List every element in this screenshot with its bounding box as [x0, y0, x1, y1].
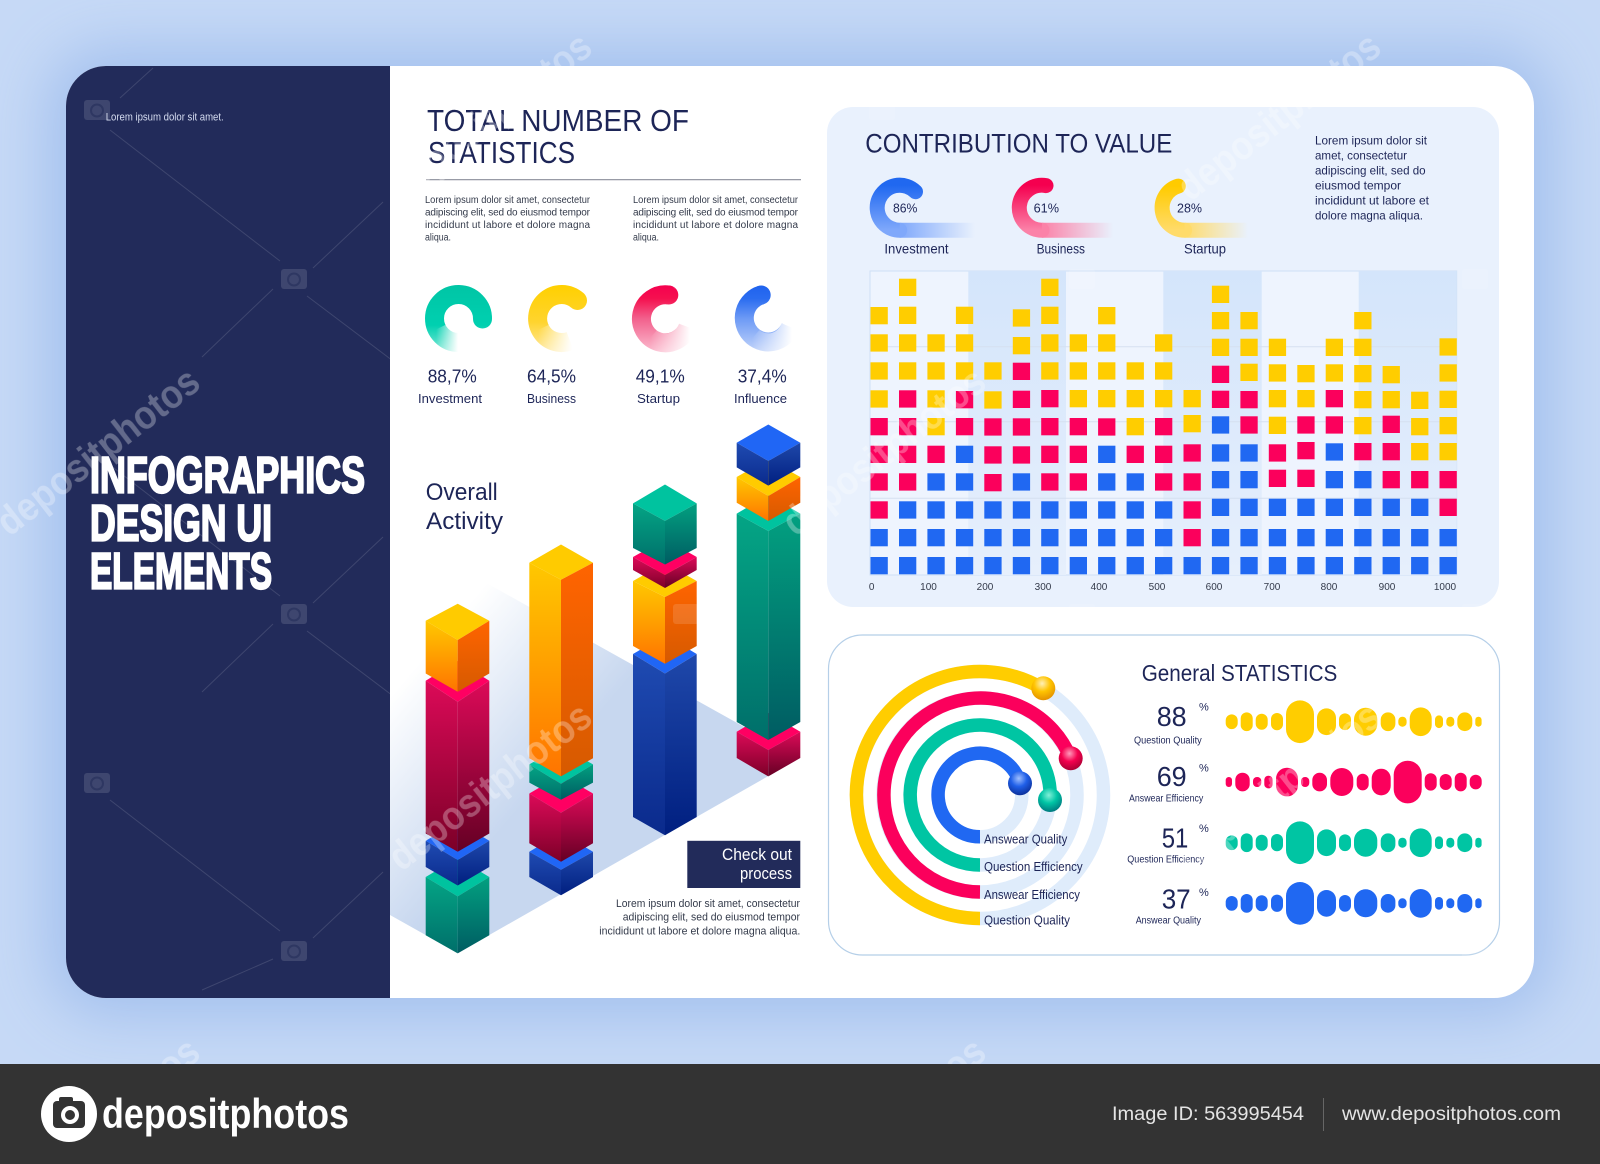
footer bar — [0, 1064, 1600, 1164]
donut: influence — [734, 286, 792, 406]
stat: answear efficiency 69: 69 — [1157, 761, 1187, 792]
stat: question efficiency 51: 51 — [1162, 822, 1188, 853]
chart x axis labels: 200 — [977, 582, 994, 593]
chart x axis labels: 800 — [1321, 582, 1338, 593]
text block: left column — [425, 195, 591, 244]
text block: right column: incididunt ut labore et dolore magna — [633, 220, 798, 231]
gauge: business: Business — [1037, 240, 1085, 256]
isometric column 2 — [529, 544, 593, 895]
wave bar: blue — [1226, 882, 1482, 925]
chart x axis labels: 500 — [1149, 582, 1166, 593]
button: check out process: Check out — [722, 846, 792, 864]
watermark overlay: depositphotos — [1169, 694, 1389, 880]
watermark overlay: depositphotos — [380, 694, 600, 880]
gauge: investment — [877, 185, 975, 256]
stat: answear efficiency 69: Answear Efficiency — [1129, 794, 1203, 805]
main title: DESIGN UI — [90, 494, 272, 552]
stat: question quality 88: Question Quality — [1134, 735, 1202, 746]
heading: overall activity — [426, 479, 504, 535]
footer image id: Image ID: 563995454 — [1112, 1104, 1304, 1125]
chart x axis labels: 600 — [1206, 582, 1223, 593]
isometric column 1 — [426, 604, 489, 953]
gauge: business: 61% — [1034, 200, 1059, 215]
donut: influence: 37,4% — [738, 367, 787, 387]
heading: contribution to value: CONTRIBUTION TO VALUE — [865, 129, 1172, 159]
donut: business: Business — [527, 391, 576, 406]
stat: question quality 88 — [1134, 701, 1209, 746]
text block: contribution description: adipiscing elit, sed do — [1315, 164, 1426, 178]
button: check out process: process — [740, 865, 792, 883]
donut: investment: Investment — [418, 391, 482, 406]
chart: stacked square bars — [870, 271, 1457, 575]
button: check out process — [687, 841, 800, 888]
donut: startup: Startup — [637, 391, 680, 406]
stat: question efficiency 51: % — [1199, 823, 1209, 835]
stat: answear quality 37 — [1136, 883, 1209, 926]
heading: overall activity: Overall — [426, 479, 498, 506]
watermark overlay: depositphotos — [1169, 24, 1389, 210]
icon: footer camera logo — [41, 1086, 97, 1142]
text block: right column — [633, 195, 799, 244]
gauge: business — [1019, 185, 1113, 256]
donut: business: 64,5% — [527, 367, 576, 387]
gauge: startup: 28% — [1177, 200, 1202, 215]
main title: ELEMENTS — [90, 542, 272, 600]
heading: total number of statistics: STATISTICS — [428, 135, 575, 170]
text block: under button: incididunt ut labore et dolore magna aliqua. — [599, 926, 800, 938]
main title: INFOGRAPHICS — [90, 446, 365, 504]
heading: general statistics: General STATISTICS — [1142, 660, 1337, 686]
text block: under button: adipiscing elit, sed do eiusmod tempor — [623, 912, 800, 924]
heading: total number of statistics: TOTAL NUMBER OF — [427, 103, 689, 138]
chart x axis labels: 100 — [920, 582, 937, 593]
radial progress chart — [856, 672, 1104, 918]
text block: left column: aliqua. — [425, 232, 451, 244]
wave bar: yellow — [1226, 700, 1482, 743]
radial chart labels: Answear Quality — [984, 832, 1068, 846]
chart x axis labels: 700 — [1264, 582, 1281, 593]
stat: question quality 88: 88 — [1157, 701, 1187, 732]
isometric column 3 — [633, 484, 697, 835]
isometric floor — [390, 529, 800, 953]
gauge: startup — [1162, 186, 1248, 256]
stat: question efficiency 51: Question Efficiency — [1127, 854, 1204, 865]
text block: contribution description: Lorem ipsum dolor sit — [1315, 133, 1428, 147]
chart x axis labels: 1000 — [1434, 582, 1457, 593]
radial chart labels — [984, 832, 1083, 927]
text block: contribution description: eiusmod tempor — [1315, 179, 1401, 193]
text block: contribution description — [1315, 133, 1430, 223]
donut: influence: Influence — [734, 391, 787, 406]
chart x axis labels: 0 — [869, 582, 875, 593]
footer website: www.depositphotos.com — [1341, 1104, 1561, 1125]
watermark overlay: depositphotos — [774, 359, 994, 545]
stat: answear efficiency 69: % — [1199, 762, 1209, 774]
panel: contribution to value — [827, 107, 1499, 607]
watermark guide lines — [110, 68, 397, 990]
stat: answear quality 37: % — [1199, 887, 1209, 899]
donut: business — [527, 291, 587, 406]
text block: right column: adipiscing elit, sed do eiusmod tempor — [633, 208, 799, 218]
chart x axis labels — [869, 582, 1457, 593]
stat: question efficiency 51 — [1127, 822, 1209, 865]
text block: under button: Lorem ipsum dolor sit amet, consectetur — [616, 898, 800, 910]
chart x axis labels: 300 — [1035, 582, 1052, 593]
watermark camera icons — [84, 100, 1488, 961]
text block: left column: Lorem ipsum dolor sit amet, consectetur — [425, 195, 591, 206]
footer brand name: depositphotos — [102, 1090, 349, 1137]
stat: answear efficiency 69 — [1129, 761, 1209, 805]
watermark camera lenses — [91, 104, 300, 958]
stat: answear quality 37: Answear Quality — [1136, 915, 1201, 926]
donut: investment: 88,7% — [428, 367, 477, 387]
main title — [90, 446, 365, 600]
text block: right column: aliqua. — [633, 232, 659, 244]
text block: right column: Lorem ipsum dolor sit amet, consectetur — [633, 195, 799, 206]
wave bar: green — [1226, 821, 1482, 864]
donut: startup: 49,1% — [636, 367, 685, 387]
watermark overlay: depositphotos — [380, 24, 600, 210]
radial chart labels: Answear Efficiency — [984, 888, 1081, 902]
radial chart labels: Question Efficiency — [984, 860, 1083, 874]
radial chart labels: Question Quality — [984, 913, 1071, 927]
text block: contribution description: incididunt ut labore et — [1315, 194, 1430, 208]
text block: left column: incididunt ut labore et dolore magna — [425, 220, 590, 231]
donut: startup — [636, 286, 689, 406]
stat: question quality 88: % — [1199, 702, 1209, 714]
wave bar: pink — [1226, 761, 1482, 803]
text block: under button — [599, 898, 800, 938]
gauge: investment: 86% — [893, 200, 918, 215]
chart x axis labels: 400 — [1091, 582, 1108, 593]
text block: contribution description: amet, consectetur — [1315, 148, 1407, 162]
chart x axis labels: 900 — [1379, 582, 1396, 593]
isometric column 4 — [737, 424, 800, 776]
card background — [66, 66, 1534, 998]
panel: general statistics — [828, 635, 1500, 955]
donut: investment — [418, 294, 492, 406]
left navy panel — [66, 66, 390, 998]
stat: answear quality 37: 37 — [1162, 883, 1191, 914]
footer divider — [1322, 1098, 1324, 1131]
small lorem caption: Lorem ipsum dolor sit amet. — [106, 111, 224, 123]
text block: left column: adipiscing elit, sed do eiusmod tempor — [425, 208, 591, 218]
heading: overall activity: Activity — [426, 508, 504, 535]
heading: total number of statistics — [426, 103, 801, 180]
text block: contribution description: dolore magna aliqua. — [1315, 209, 1423, 223]
gauge: startup: Startup — [1184, 240, 1226, 256]
gauge: investment: Investment — [884, 240, 949, 256]
